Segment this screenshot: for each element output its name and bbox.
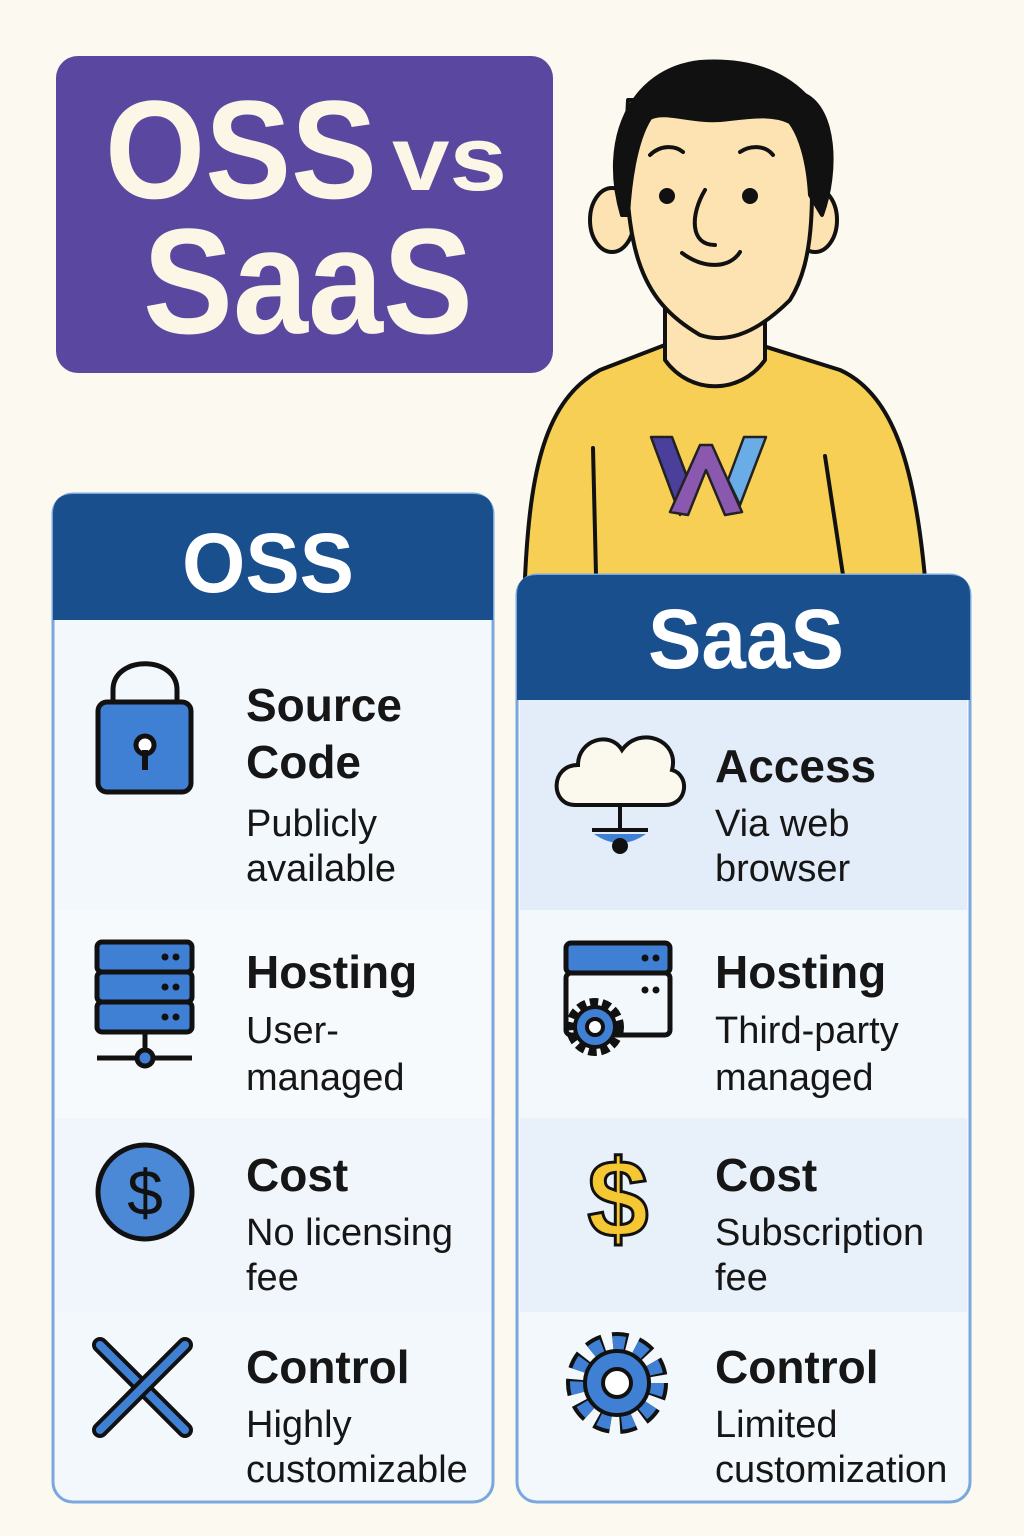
panel: OSS xyxy=(53,494,493,1502)
text: hosting: User- xyxy=(246,1010,339,1052)
text: cost: Cost xyxy=(246,1149,348,1201)
text: cost: Subscription xyxy=(715,1212,924,1254)
icon: server gear xyxy=(566,943,670,1051)
text: control: Control xyxy=(715,1341,879,1393)
icon: dollar sign: $ xyxy=(587,1138,649,1261)
title: OSS xyxy=(105,71,377,228)
text: hosting: managed xyxy=(246,1057,404,1099)
title: SaaS xyxy=(143,197,473,365)
text: cost: No licensing xyxy=(246,1212,453,1254)
text: cost: Cost xyxy=(715,1149,817,1201)
text: control xyxy=(246,1341,468,1491)
text: access: browser xyxy=(715,848,850,890)
text: control: Control xyxy=(246,1341,410,1393)
icon: server xyxy=(97,942,192,1066)
text: control: Limited xyxy=(715,1404,838,1446)
text: cost xyxy=(715,1149,924,1299)
text: source code xyxy=(246,679,402,890)
title: vs xyxy=(392,108,507,210)
icon: cloud xyxy=(557,737,684,852)
icon: dollar coin: $ xyxy=(127,1157,163,1229)
text: cost: fee xyxy=(715,1257,768,1299)
text: control xyxy=(715,1341,947,1491)
text: hosting: Hosting xyxy=(246,946,417,998)
icon: gear xyxy=(577,1343,657,1423)
text: access: Via web xyxy=(715,803,850,845)
text: source code: Publicly xyxy=(246,803,377,845)
icon: tools xyxy=(100,1345,185,1430)
text: hosting: managed xyxy=(715,1057,873,1099)
heading: SaaS: SaaS xyxy=(648,592,844,686)
icon: dollar coin xyxy=(98,1145,192,1239)
text: source code: Source xyxy=(246,679,402,731)
icon: W logo xyxy=(651,437,766,515)
text: cost xyxy=(246,1149,453,1299)
text: source code: available xyxy=(246,848,396,890)
text: access: Access xyxy=(715,740,876,792)
text: source code: Code xyxy=(246,736,361,788)
text: hosting: Third-party xyxy=(715,1010,899,1052)
text: control: Highly xyxy=(246,1404,352,1446)
text: control: customization xyxy=(715,1449,947,1491)
text: control: customizable xyxy=(246,1449,468,1491)
title xyxy=(56,56,553,373)
text: hosting: Hosting xyxy=(715,946,886,998)
panel: SaaS xyxy=(517,575,970,1502)
text: hosting xyxy=(715,946,899,1099)
icon: padlock xyxy=(98,664,191,792)
person illustration xyxy=(525,62,925,578)
heading: OSS: OSS xyxy=(182,516,354,610)
text: cost: fee xyxy=(246,1257,299,1299)
text: access xyxy=(715,740,876,890)
text: hosting xyxy=(246,946,417,1099)
